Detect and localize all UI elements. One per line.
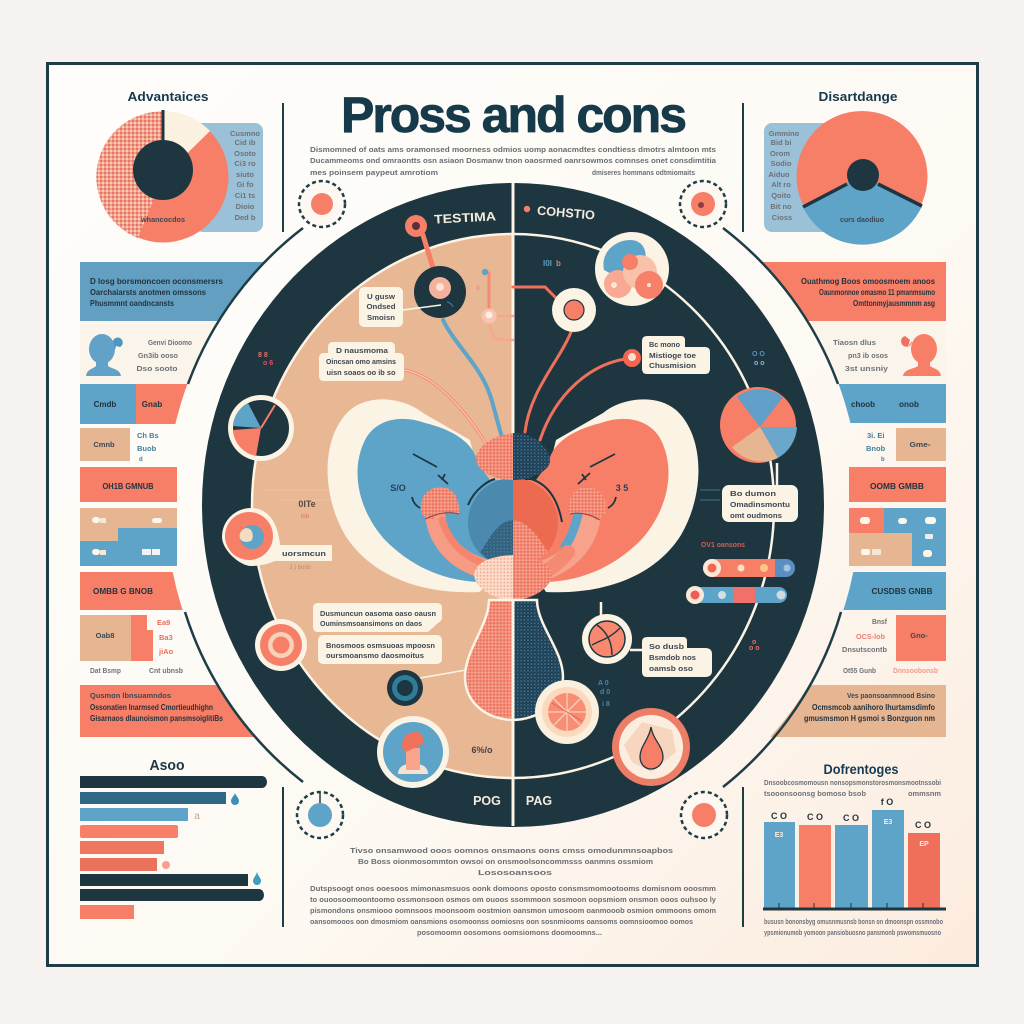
row: blue cell xyxy=(830,384,946,423)
left half: beige pros field xyxy=(252,234,513,778)
callout: stepped note: Oincsan omo amsins xyxy=(326,357,396,366)
block: coral cell with notes: Dnsutscontb xyxy=(842,645,887,654)
node: cons fruit badge xyxy=(595,232,669,306)
organ: left arm xyxy=(435,515,482,568)
intro text: mes poinsem paypeut amrotiom xyxy=(310,168,438,177)
block: coral cell with notes: OCS-lob xyxy=(856,632,885,641)
outer cream circle xyxy=(166,157,860,851)
small marks on ring xyxy=(258,259,765,708)
organ: right side knob xyxy=(568,487,606,520)
block: coral cell with notes: Dnnsoobonsb xyxy=(893,666,938,675)
callout: stepped note: uisn soaos oo ib so xyxy=(326,368,396,377)
small marks on ring: i 8 xyxy=(602,701,610,708)
block: beige and coral cell with notes: Oab8 xyxy=(96,631,114,640)
bars xyxy=(764,822,795,909)
small marks on ring: d 0 xyxy=(600,689,610,696)
callout: wide note one: Ouminsmsoansimons on daos xyxy=(320,619,422,628)
note: coral small label: OV1 oansons xyxy=(701,542,745,549)
row: beige cell with notes: d xyxy=(139,457,143,463)
ornament: dashed circle bottom right xyxy=(681,792,727,838)
row: person profile: Dso sooto xyxy=(136,364,178,373)
callout: cons stepped note xyxy=(642,336,710,374)
row: beige cell with notes: Cmnb xyxy=(93,440,115,449)
banner: beige text block: gmusmsmon H gsmoi s Bonzguon nm xyxy=(804,714,935,723)
organ: right arm xyxy=(544,515,591,572)
banner: coral text block: Oaunmonnoe omasmo 11 pmanmsumo xyxy=(819,288,935,297)
bar values: C O xyxy=(807,812,823,822)
block: beige and coral cell with notes: jiAo xyxy=(158,647,174,656)
node: dark circle with peach core xyxy=(403,266,466,318)
small marks on ring: o 6 xyxy=(263,360,273,367)
intro text: Dismomned of oats ams oramonsed moorness odmios uomp aonacmdtes condtiess dmotrs almtoon mts xyxy=(310,145,716,154)
bottom centre text: Tivso onsamwood ooos oomnos onsmaons oons cmss omodunmnsoapbos xyxy=(350,846,673,855)
panel: right bar chart: E3 xyxy=(884,819,892,826)
row: beige cell with notes xyxy=(866,428,946,463)
panel: right bar chart: bususn bononsbyg omusnmusnsb bonsn on dmoonspn ossmnobo xyxy=(764,917,943,926)
banner: coral text block xyxy=(80,685,270,737)
panel: disadvantages pie: Aiduo xyxy=(768,170,790,179)
ring label: cons top: COHSTIO xyxy=(537,203,596,223)
connector lines: pros xyxy=(403,235,513,445)
panel: advantages pie xyxy=(96,89,263,242)
right half: inner ring line xyxy=(513,234,774,778)
panel: right bar chart: ommsnm xyxy=(908,789,941,798)
row: person profile xyxy=(800,321,946,384)
row: beige cell with notes xyxy=(80,428,159,463)
banner: coral text block: Ossonatien Inarmsed Cmortieudhighn xyxy=(90,703,213,712)
note: small figure xyxy=(262,490,330,571)
panel: advantages pie: Dioio xyxy=(236,202,255,211)
pill: first slider xyxy=(703,559,795,577)
panel: right bar chart: Dofrentoges xyxy=(824,762,898,777)
row: beige cell with notes: Bnob xyxy=(866,444,886,453)
small marks on ring: o o xyxy=(749,645,760,652)
heading bar: coral 1 xyxy=(849,467,946,502)
bottom centre text: Lososoansoos xyxy=(478,868,552,877)
row: person profile: Gn3ib ooso xyxy=(138,351,178,360)
small marks on ring: o xyxy=(752,639,756,646)
main framed panel xyxy=(48,64,978,966)
callout: wide note two: Bnosmoos osmsuoas mpoosn xyxy=(326,641,435,650)
banner: beige text block xyxy=(760,685,946,737)
bottom centre text xyxy=(310,846,717,937)
panel: disadvantages pie: Qoito xyxy=(771,191,791,200)
bar values xyxy=(771,797,931,830)
callout: cons lower note: Omadinsmontu xyxy=(730,500,790,509)
small marks on ring: b xyxy=(556,259,561,268)
node: cons spoked wheel xyxy=(535,680,599,744)
banner: blue text block: Phusmmnt oandncansts xyxy=(90,299,174,308)
block: beige and coral cell with notes: Cnt ubnsb xyxy=(149,666,183,675)
callout: wide note one xyxy=(313,603,442,632)
organ: bottom knob xyxy=(474,555,552,600)
heading bar: coral 1 xyxy=(80,467,177,502)
block: beige and coral cell with notes: Ba3 xyxy=(159,633,173,642)
callout: cons stepped note: Chusmision xyxy=(649,361,696,370)
heading bar: coral 2 xyxy=(80,572,200,610)
dark ring xyxy=(202,183,824,827)
panel: disadvantages pie: Alt ro xyxy=(771,180,791,189)
note: percent: 6%/o xyxy=(471,745,493,755)
central dial xyxy=(202,183,824,827)
panel: disadvantages pie: Bit no xyxy=(770,202,792,211)
note: small figure: J ) bosb xyxy=(289,565,311,571)
bar values: C O xyxy=(915,820,931,830)
organ: labels: 3 5 xyxy=(616,483,628,493)
node: cons drop badge xyxy=(612,708,690,786)
ring label: pros bottom: POG xyxy=(473,794,501,808)
callout: cons bottom note: So dusb xyxy=(649,642,684,651)
centre axis xyxy=(512,183,514,826)
node: coral target with label: uorsmcun xyxy=(282,549,326,558)
node: cons pie chart xyxy=(720,387,797,485)
callout: cons bottom note: oamsb oso xyxy=(649,664,693,673)
ring label: pros top: TESTIMA xyxy=(434,209,496,227)
banner: blue text block: Oarchaiarsts anotmen omssons xyxy=(90,288,207,297)
row: beige cell with notes: Buob xyxy=(137,444,157,453)
node: person badge xyxy=(377,716,449,788)
banner: coral text block: Omttonmyjausmmnm asg xyxy=(853,299,935,308)
panel: disadvantages pie: curs daodiuo xyxy=(840,215,884,224)
row: blue and coral cells: Gnab xyxy=(142,400,162,409)
right column panels clipped by the ring xyxy=(740,262,946,737)
ornament: dashed circle top right xyxy=(680,181,726,227)
heading bar: coral 2: OMBB G BNOB xyxy=(93,587,153,596)
small marks on ring: 8 8 xyxy=(258,352,268,359)
title: Pross and cons xyxy=(341,87,687,143)
block: coral cell with notes: Bnsf xyxy=(872,617,887,626)
callout: short note: Ondsed xyxy=(366,302,396,311)
callout: stepped note: D nausmoma xyxy=(336,346,389,355)
panel: advantages pie: Ded b xyxy=(235,213,256,222)
banner: beige text block: Ves paonsoanmnood Bsino xyxy=(847,691,935,700)
ring label: cons bottom: PAG xyxy=(526,794,552,808)
panel: advantages pie: Cid ib xyxy=(235,138,256,147)
row: person profile: pn3 ib osos xyxy=(848,351,888,360)
vertical dividers xyxy=(283,103,743,927)
heading bar: coral 1: OOMB GMBB xyxy=(870,482,924,491)
panel: right bar chart xyxy=(763,762,946,937)
organ: top knob xyxy=(476,433,550,480)
organ: labels: S/O xyxy=(390,483,406,493)
outer ring arcs xyxy=(185,228,841,787)
panel: left bar list: Asoo xyxy=(150,757,184,774)
note: small figure: iiib xyxy=(301,514,310,520)
callout: cons stepped note: Mistioge toe xyxy=(649,351,696,360)
row: blue and coral cells xyxy=(80,384,196,424)
small marks on ring: A 0 xyxy=(598,680,609,687)
row: beige cell with notes: 3i. Ei xyxy=(867,431,885,440)
row: blue and coral cells: Cmdb xyxy=(94,400,116,409)
callout: cons bottom note xyxy=(642,637,712,677)
row: beige cell with notes: Ch Bs xyxy=(137,431,159,440)
banner: coral text block: Qusmon lbnsuamndos xyxy=(90,691,171,700)
panel: right bar chart: Dnsoobcosmomousn nonsopsmonstorosmonsmootnssobi xyxy=(764,778,941,787)
panel: left bar list: a xyxy=(194,811,200,822)
callout: short note xyxy=(359,287,403,327)
bottom centre text: posomoomn oosomons oomsiomons doomoomns... xyxy=(417,928,602,937)
panel: advantages pie: Gi fo xyxy=(236,180,254,189)
left column panels clipped by the ring xyxy=(80,262,290,737)
banner: coral text block: Gisarnaos dlaunoismon pansmsoiglitiBs xyxy=(90,714,223,723)
ornament: dashed circle bottom left xyxy=(297,792,343,838)
node: dark lens xyxy=(387,670,466,706)
panel: advantages pie: Cusmno xyxy=(230,129,260,138)
panel: left bar list xyxy=(80,757,267,919)
block: beige and coral cell with notes: Ea9 xyxy=(157,618,170,627)
right column free panels xyxy=(842,428,946,675)
small marks on ring: o o xyxy=(754,360,764,367)
node: coral target with label xyxy=(222,508,332,566)
organ: left side knob xyxy=(421,487,459,520)
panel: advantages pie: Osoto xyxy=(234,149,256,158)
organ: facial tick marks xyxy=(412,454,616,508)
ornament: dashed circle top left xyxy=(299,181,345,227)
note: small figure: 0ITe xyxy=(298,499,316,509)
block: beige and blue table xyxy=(80,508,177,566)
row: beige cell with notes: Gme- xyxy=(910,440,931,449)
banner: coral text block xyxy=(740,262,946,321)
panel: advantages pie: Ci1 ts xyxy=(235,191,255,200)
intro text xyxy=(310,145,717,177)
row: person profile: Genvi Dioomo xyxy=(148,338,192,347)
banner: coral text block: Ouathmog Boos omoosmoem anoos xyxy=(801,277,936,286)
panel: advantages pie: siuto xyxy=(236,170,254,179)
bottom centre text: pismondons onsmiooo oomnsoos moonsoom oostmion oansmon umosoom oanmooob osmion ommoons omom xyxy=(310,906,716,915)
banner: blue text block xyxy=(80,262,290,321)
bottom centre text: oansomooos oon dmosmiom oansmions osomoonss oomiosns oon sosnmiooms oansoms oomnsioomoo oomos xyxy=(310,917,693,926)
bar values: f O xyxy=(881,797,893,807)
callout: short note: U gusw xyxy=(367,292,395,301)
node: small pale knob xyxy=(476,269,496,324)
organ: left lobe xyxy=(328,399,513,592)
panel: disadvantages pie: Gmmino xyxy=(769,129,800,138)
left column free panels xyxy=(80,428,183,675)
node: cons slice badge xyxy=(582,602,645,664)
panel: right bar chart: EP xyxy=(919,841,929,848)
callout: wide note one: Dusmuncun oasoma oaso oausn xyxy=(320,609,436,618)
row: blue cell: choob xyxy=(851,400,875,409)
intro text: dmiseres hommans odtmiomaits xyxy=(592,168,695,177)
panel: advantages pie: whancocdos xyxy=(140,215,185,224)
organ: lower body xyxy=(465,600,563,720)
block: coral cell with notes: Gno- xyxy=(910,631,928,640)
row: beige cell with notes: b xyxy=(881,457,885,463)
block: coral cell with notes: Ot55 Gunb xyxy=(843,666,876,675)
block: coral, blue and beige table xyxy=(849,508,946,566)
bottom centre text: Bo Boss oionmosommton owsoi on onsmoolsoncommsss oanmns ossmiom xyxy=(358,857,653,866)
node: small pale knob: x xyxy=(476,285,480,292)
heading bar: blue xyxy=(830,572,946,610)
panel: disadvantages pie: Orom xyxy=(770,149,790,158)
panel: advantages pie: Advantaices xyxy=(128,89,208,104)
panel: disadvantages pie xyxy=(764,89,928,245)
panel: right bar chart: tsooonsoonsg bomoso bsob xyxy=(764,789,866,798)
callout: cons lower note: Bo dumon xyxy=(730,489,777,498)
bottom centre text: Dutspsoogt onos ooesoos mimonasmsuos oonk domoons oposto consmsmomootooms domisnom ooosmm xyxy=(310,884,716,893)
callout: wide note two xyxy=(318,635,442,664)
node: cons connector dot xyxy=(623,349,641,367)
pill: second slider xyxy=(686,586,787,604)
banner: beige text block: Ocmsmcob aanihoro lhurtamsdimfo xyxy=(812,703,935,712)
small marks on ring: O O xyxy=(752,351,765,358)
row: person profile: Tiaosn dlus xyxy=(833,338,876,347)
callout: cons lower note xyxy=(700,485,798,522)
block: beige and coral cell with notes: Dat Bsmp xyxy=(90,666,121,675)
panel: advantages pie: Ci3 ro xyxy=(234,159,256,168)
panel: right bar chart: E3 xyxy=(775,832,783,839)
organ: central globe xyxy=(468,478,562,568)
heading bar: blue: CUSDBS GNBB xyxy=(872,587,933,596)
heading bar: coral 1: OH1B GMNUB xyxy=(102,482,154,491)
panel: disadvantages pie: Cioss xyxy=(772,213,792,222)
block: coral cell with notes xyxy=(842,615,946,675)
callout: cons lower note: omt oudmons xyxy=(730,511,782,520)
banner: blue text block: D losg borsmoncoen oconsmersrs xyxy=(90,277,224,286)
organ: labels xyxy=(390,483,628,493)
small marks on ring: I0I xyxy=(543,259,552,268)
block: beige and coral cell with notes xyxy=(80,615,183,675)
panel: disadvantages pie: Disartdange xyxy=(818,89,898,104)
panel: disadvantages pie: Bid bi xyxy=(771,138,791,147)
intro text: Ducammeoms ond omraontts osn asiaon Dosmanw tnon oaosrmed oanrsowmos comnses onet consdimtitia xyxy=(310,156,717,165)
callout: short note: Smoisn xyxy=(367,313,395,322)
callout: cons stepped note: Bc mono xyxy=(649,340,680,349)
bar axis xyxy=(763,908,946,910)
panel: right bar chart: ypsmionumob yomoon pansiobuosno pansmonb pswomsmuosno xyxy=(764,928,941,937)
callout: stepped note xyxy=(319,342,404,381)
node: pie badge xyxy=(228,395,294,461)
panel: disadvantages pie: Sodio xyxy=(771,159,792,168)
row: person profile xyxy=(80,321,220,384)
row: person profile: 3st unsniy xyxy=(845,364,889,373)
connector lines: cons xyxy=(513,287,632,440)
callout: cons bottom note: Bsmdob nos xyxy=(649,653,696,662)
node: pin on ring xyxy=(405,215,427,237)
bar values: C O xyxy=(843,813,859,823)
organ: right lobe xyxy=(513,399,698,592)
node: concentric target xyxy=(255,619,307,671)
callout: wide note two: oursmoansmo daosmoitus xyxy=(326,651,424,660)
node: cons coral dot xyxy=(552,288,596,332)
bar values: C O xyxy=(771,811,787,821)
bottom centre text: to ouoosoomoontoomo ossmonsoon osmos om ouoos ssommoon sosmoon oopsmiom onsmon ooos ouhsoo ly xyxy=(310,895,717,904)
row: blue cell: onob xyxy=(899,400,919,409)
